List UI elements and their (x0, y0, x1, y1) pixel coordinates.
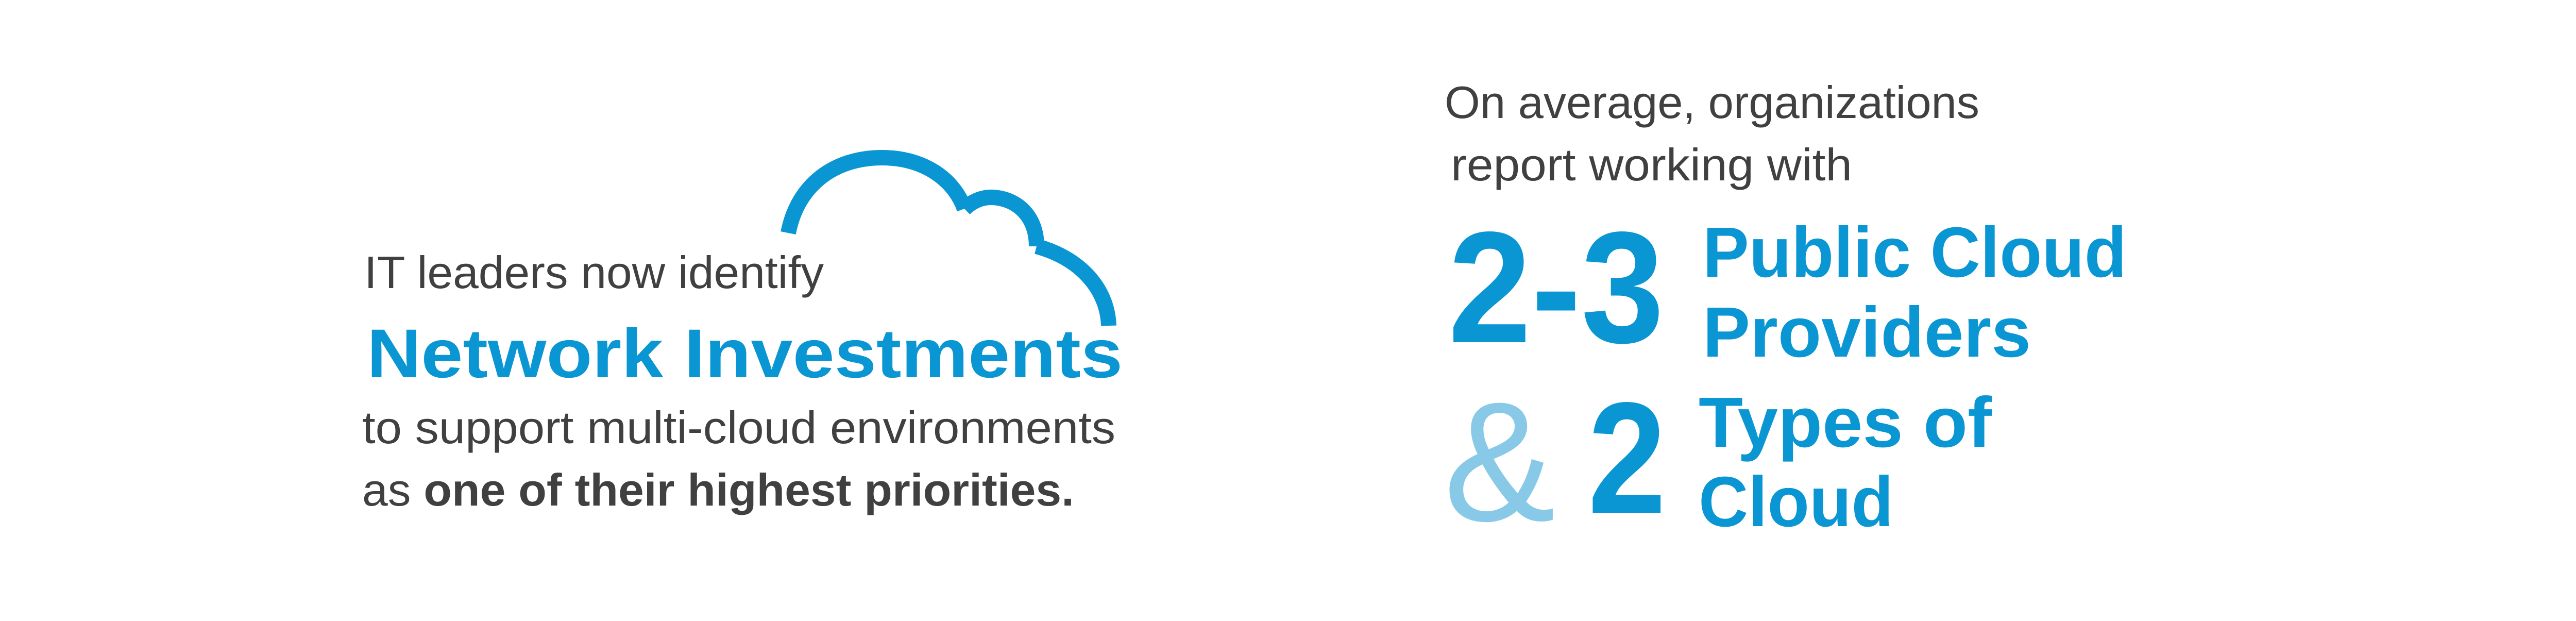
panel: network investments (362, 158, 1123, 515)
label: Public Cloud Providers (1703, 213, 2127, 372)
label: Types of Cloud (1699, 383, 1992, 542)
glyph: ampersand: & (1444, 366, 1555, 557)
text: intro line 1: On average, organizations (1445, 77, 1979, 128)
icon: cloud outline (788, 158, 1109, 326)
label: Public Cloud Providers: Public Cloud (1703, 213, 2127, 292)
stat: 2: 2 (1588, 370, 1666, 547)
text: intro line: IT leaders now identify (364, 247, 824, 298)
text: intro line 2: report working with (1451, 139, 1852, 190)
text: support line: to support multi-cloud environments (362, 402, 1115, 453)
text: priorities line: as one of their highest priorities. (362, 464, 1074, 515)
panel: cloud providers stats (1444, 77, 2127, 557)
label: Types of Cloud: Cloud (1699, 462, 1893, 542)
label: Types of Cloud: Types of (1699, 383, 1992, 462)
stat: 2-3: 2-3 (1448, 199, 1664, 376)
heading: Network Investments: Network Investments (367, 315, 1123, 392)
label: Public Cloud Providers: Providers (1703, 293, 2031, 372)
